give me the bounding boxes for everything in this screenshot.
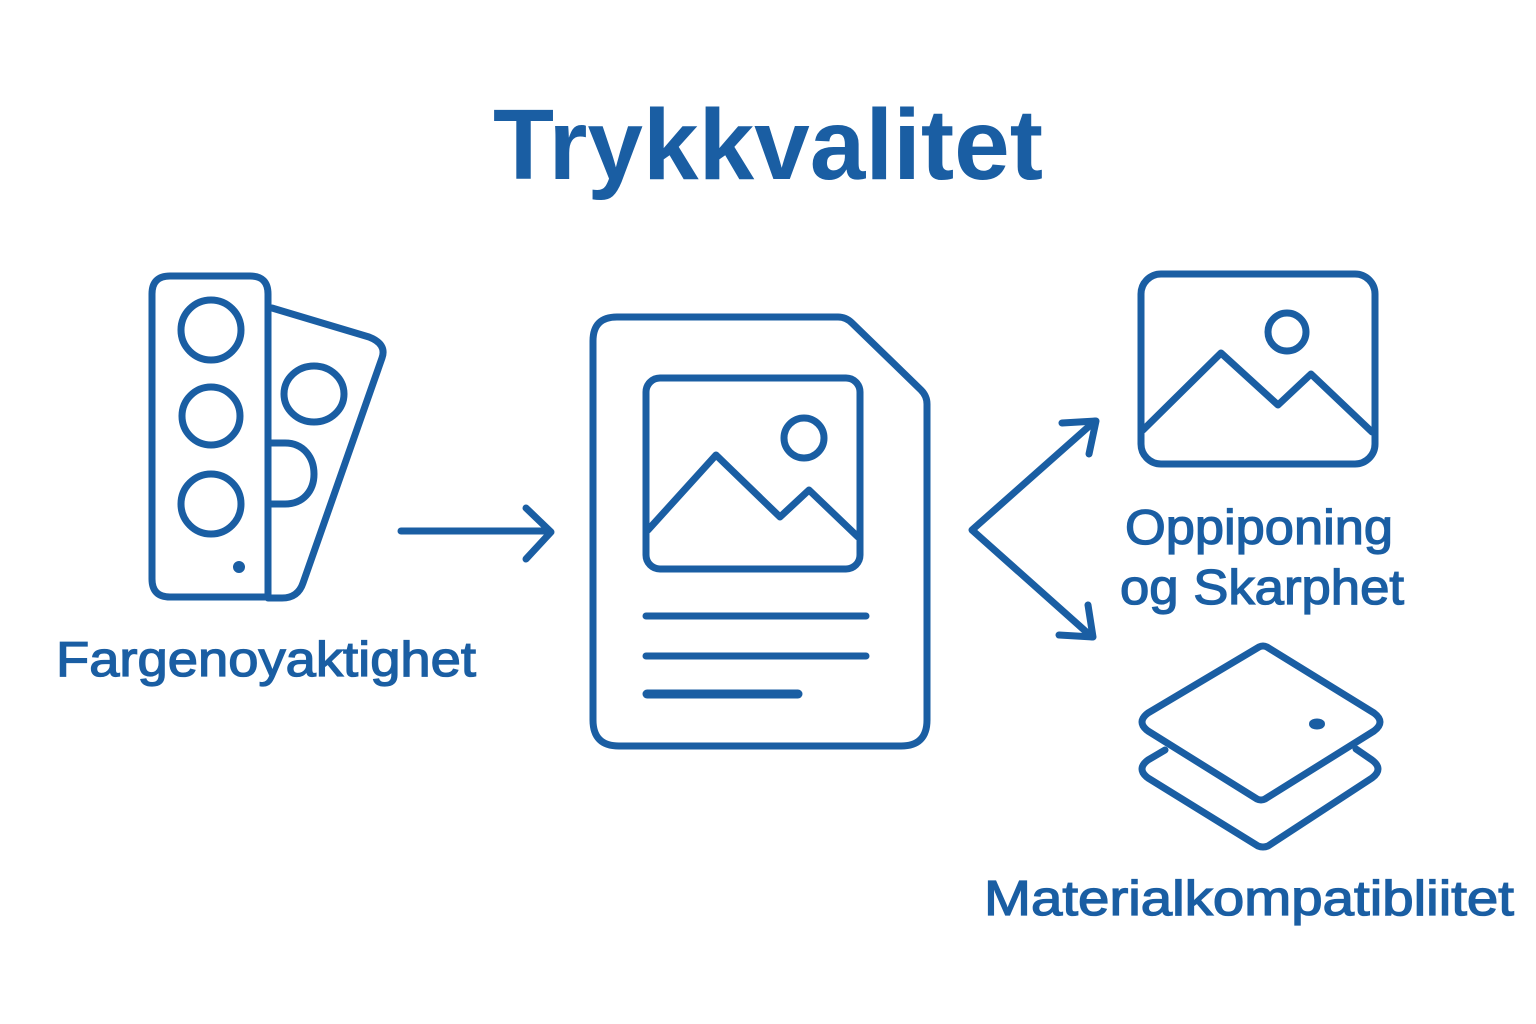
arrow: swatches to document bbox=[401, 508, 551, 559]
label: resolution and sharpness: og Skarphet bbox=[1120, 561, 1404, 615]
icon: material layers bbox=[1142, 646, 1380, 847]
label: resolution and sharpness: Oppiponing bbox=[1125, 501, 1393, 555]
icon: image sharpness bbox=[1141, 274, 1375, 464]
icon: colour swatches bbox=[152, 276, 383, 598]
label: colour accuracy: Fargenoyaktighet bbox=[56, 633, 476, 687]
label: material compatibility: Materialkompatibliitet bbox=[984, 872, 1514, 926]
label: resolution and sharpness bbox=[1120, 501, 1404, 615]
arrows: branching to outcomes bbox=[972, 421, 1096, 637]
icon: printed document bbox=[593, 317, 927, 746]
title: Trykkvalitet bbox=[493, 89, 1043, 201]
